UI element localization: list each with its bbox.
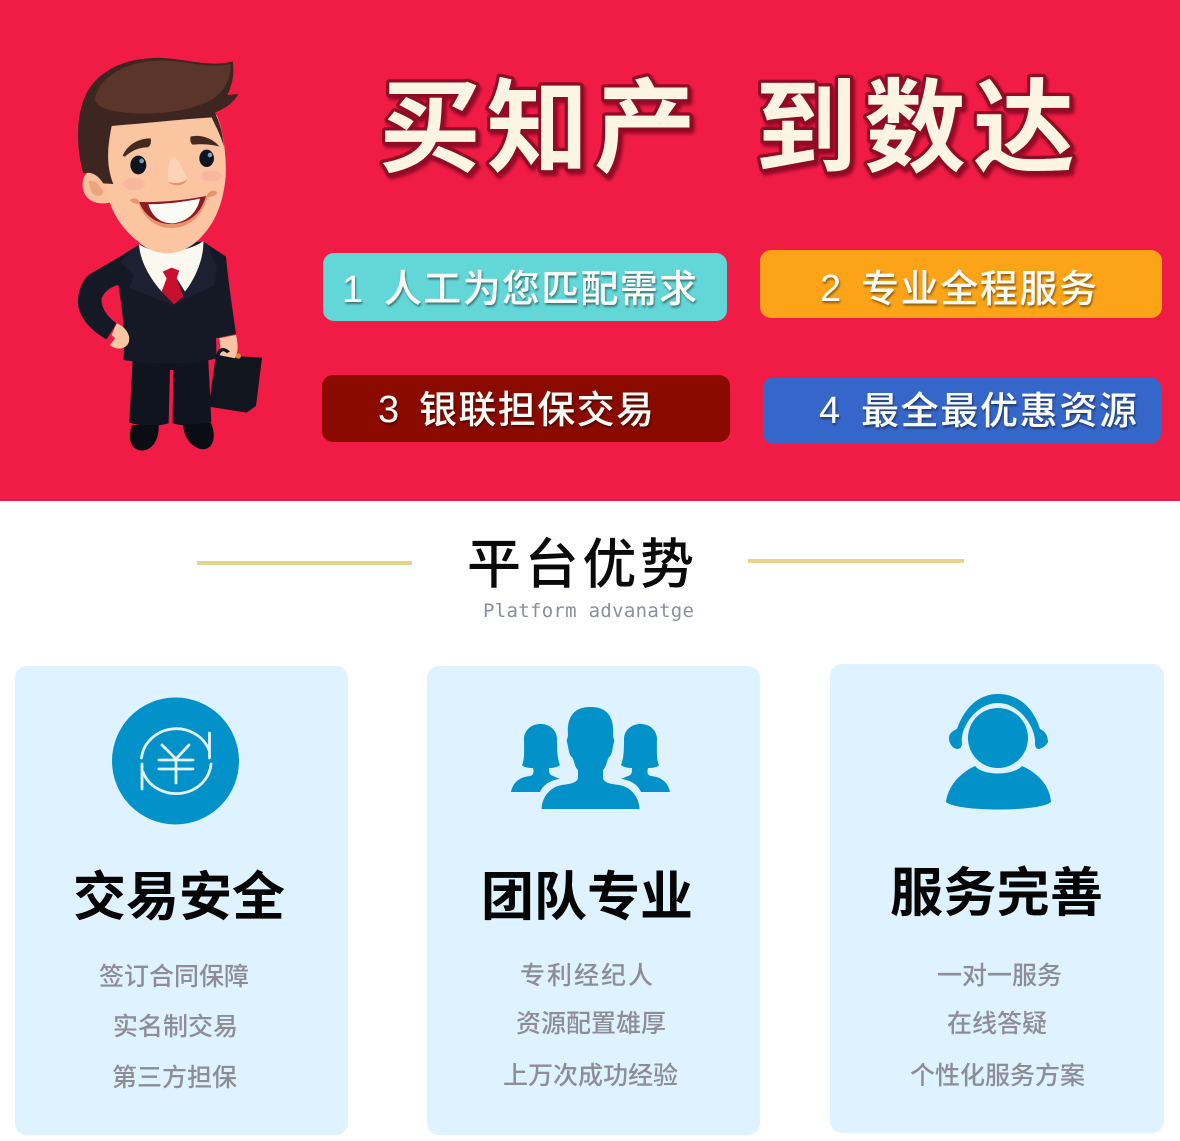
feature badge 4 — [763, 377, 1161, 444]
feature badge 3 — [322, 375, 730, 442]
card list: 实名制交易 — [113, 1007, 238, 1043]
card list: 在线答疑 — [947, 1004, 1047, 1040]
lapels — [120, 242, 217, 305]
card list — [910, 956, 1085, 1092]
card list — [99, 957, 249, 1094]
nose — [168, 157, 187, 185]
smile — [130, 191, 217, 228]
card list: 第三方担保 — [112, 1058, 237, 1094]
card list: 签订合同保障 — [99, 957, 249, 993]
icon: team of three people — [511, 707, 670, 809]
card title: 团队专业 — [481, 855, 693, 931]
feature badge 4: 最全最优惠资源 — [861, 380, 1137, 435]
feature badge 2 — [760, 250, 1162, 318]
card list: 专利经纪人 — [520, 956, 653, 992]
ear — [83, 171, 110, 203]
card list — [503, 956, 678, 1092]
panel: professional team — [427, 666, 760, 1135]
icon: headset agent — [946, 694, 1051, 810]
eyebrows — [123, 138, 151, 157]
illustration: businessman with briefcase — [78, 58, 262, 451]
jacket — [78, 242, 236, 364]
panel: transaction security — [15, 666, 348, 1135]
cheeks — [123, 178, 145, 190]
card list: 一对一服务 — [937, 956, 1062, 992]
section heading: 平台优势 — [467, 520, 694, 599]
icon: yen exchange — [112, 698, 239, 824]
card title: 服务完善 — [890, 851, 1103, 927]
hand holding case — [218, 335, 238, 358]
title: 到数达 — [755, 47, 1075, 194]
hair — [78, 58, 238, 184]
briefcase — [209, 355, 262, 413]
section heading: Platform advanatge — [483, 600, 694, 622]
panel: complete service — [830, 664, 1164, 1133]
trousers — [129, 360, 211, 426]
feature badge 4: 4 — [819, 390, 840, 432]
title: 买知产 — [379, 47, 696, 194]
title — [379, 47, 1075, 194]
tie — [162, 268, 183, 304]
feature badge 3: 银联担保交易 — [419, 379, 654, 434]
feature badge 1: 人工为您匹配需求 — [384, 258, 697, 313]
face — [106, 115, 226, 253]
feature badge 1: 1 — [342, 269, 363, 311]
feature badge 2: 2 — [820, 268, 841, 310]
shirt collar — [139, 241, 203, 292]
card list: 个性化服务方案 — [910, 1056, 1085, 1092]
red hero banner background — [0, 0, 1180, 501]
card title: 交易安全 — [73, 855, 285, 931]
shoes — [130, 425, 159, 451]
feature badge 3: 3 — [378, 389, 399, 431]
card list: 上万次成功经验 — [503, 1056, 678, 1092]
card list: 资源配置雄厚 — [516, 1004, 666, 1040]
feature badge 2: 专业全程服务 — [861, 258, 1097, 313]
feature badge 1 — [323, 253, 727, 321]
hand on hip — [110, 323, 129, 349]
eyes — [130, 156, 146, 174]
